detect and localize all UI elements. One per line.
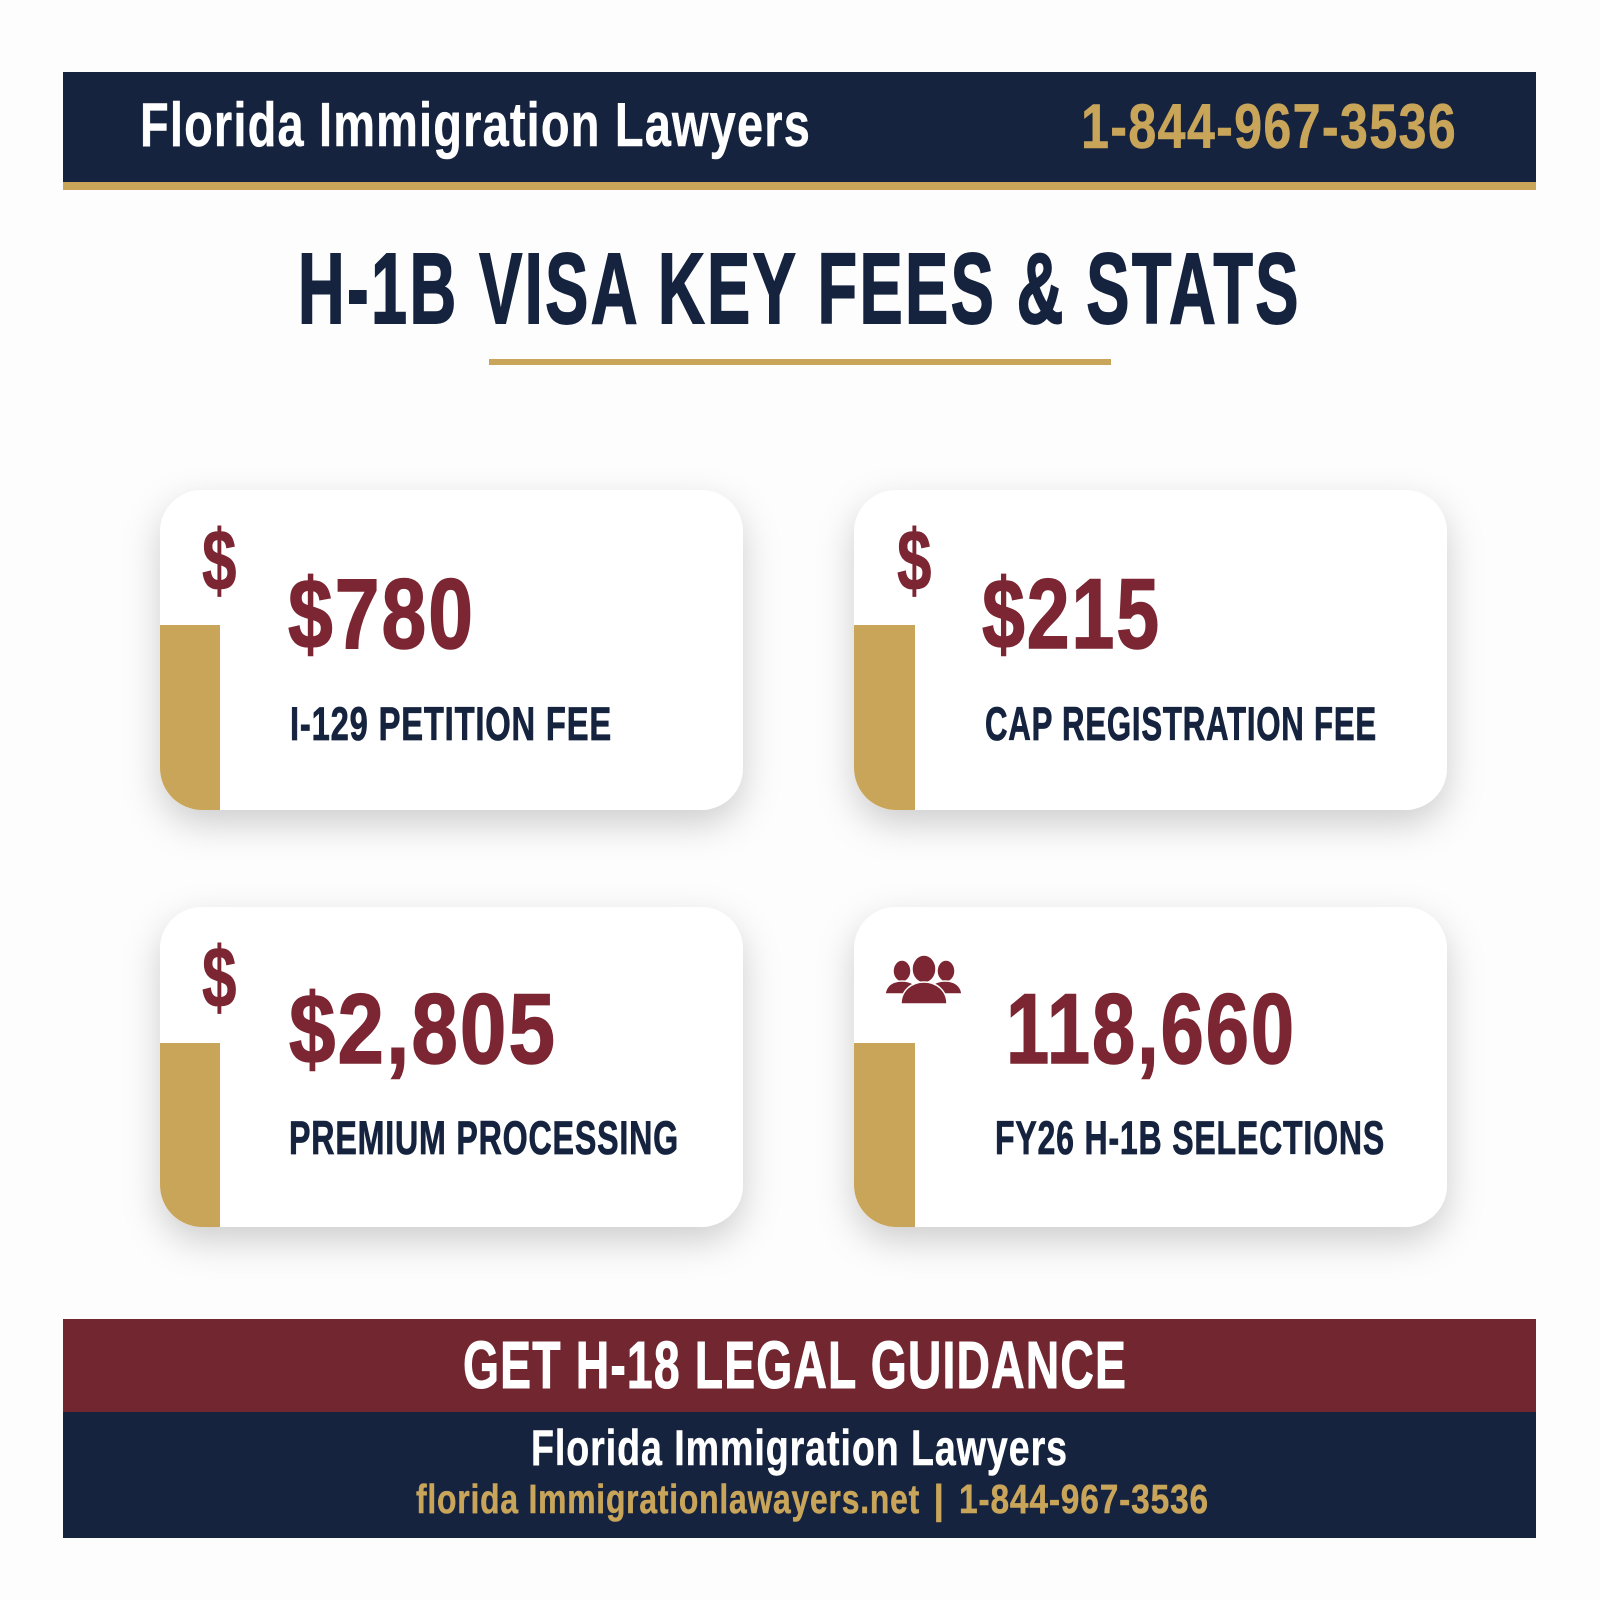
stat value: $780 <box>288 558 475 669</box>
panel: I-129 petition fee <box>160 490 743 810</box>
icon: dollar sign: $ <box>202 930 238 1026</box>
firm name: Florida Immigration Lawyers <box>140 91 811 160</box>
icon: dollar sign: $ <box>202 513 238 609</box>
stat value: 118,660 <box>1006 973 1296 1084</box>
stat label: CAP REGISTRATION FEE <box>985 697 1377 750</box>
phone number: 1-844-967-3536 <box>1081 92 1457 162</box>
footer contact band <box>63 1412 1536 1538</box>
panel: premium processing <box>160 907 743 1227</box>
call to action heading: GET H-18 LEGAL GUIDANCE <box>463 1328 1127 1403</box>
footer contact line: | <box>933 1476 946 1522</box>
stat value: $2,805 <box>289 973 557 1084</box>
footer call-to-action band <box>63 1319 1536 1412</box>
stat label: PREMIUM PROCESSING <box>289 1111 679 1164</box>
panel: FY26 H-1B selections <box>854 907 1447 1227</box>
footer contact line: 1-844-967-3536 <box>959 1476 1209 1522</box>
stat label: I-129 PETITION FEE <box>290 697 612 750</box>
stat label: FY26 H-1B SELECTIONS <box>995 1111 1385 1164</box>
footer contact line: florida Immigrationlawayers.net <box>416 1476 920 1522</box>
header banner <box>63 72 1536 190</box>
main title <box>298 233 1301 365</box>
panel: cap registration fee <box>854 490 1447 810</box>
icon: dollar sign: $ <box>897 513 933 609</box>
stat value: $215 <box>982 558 1161 669</box>
icon: group of people <box>885 955 962 1004</box>
footer firm name: Florida Immigration Lawyers <box>531 1420 1068 1476</box>
